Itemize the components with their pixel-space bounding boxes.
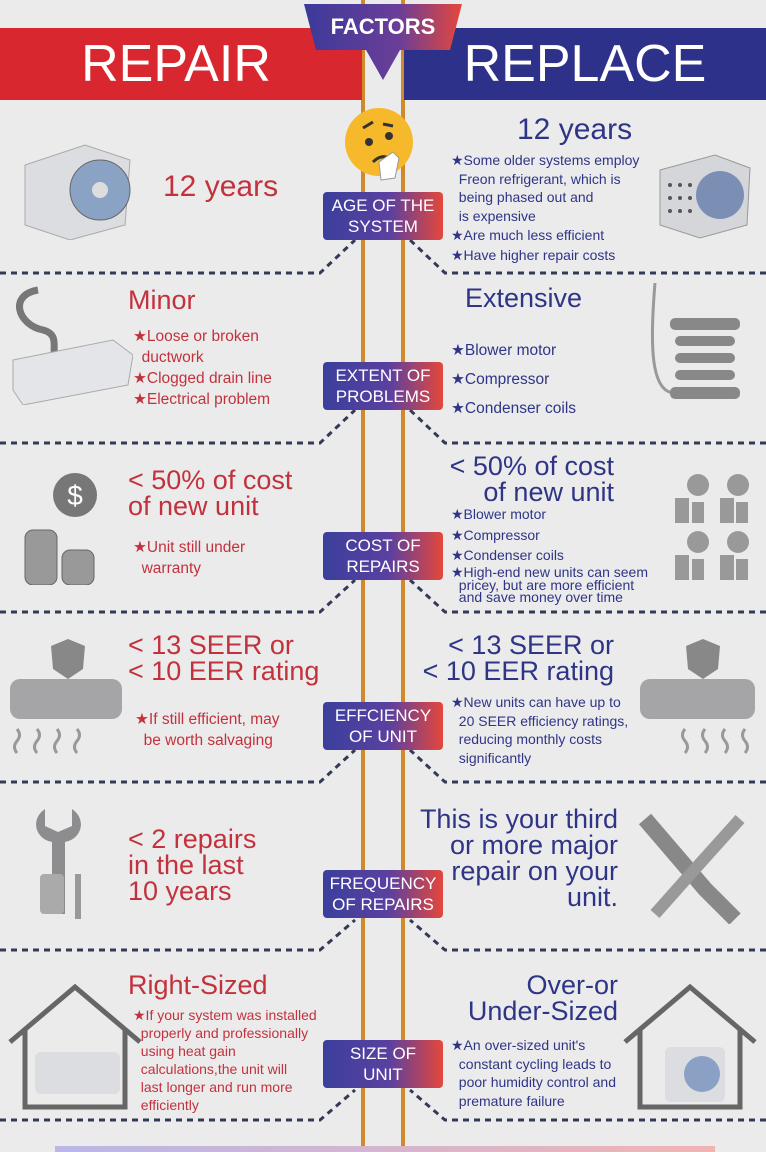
section 3: cost: pricey, but are more efficient bbox=[459, 576, 634, 592]
label: extent: EXTENT OF bbox=[335, 366, 431, 385]
heading bbox=[128, 465, 292, 521]
section 6: size: constant cycling leads to bbox=[459, 1056, 611, 1072]
label: size bbox=[323, 1040, 443, 1088]
icon: wrench hand bbox=[36, 809, 81, 919]
section 6: size bbox=[8, 970, 756, 1113]
section 3: cost: warranty bbox=[142, 560, 201, 577]
header: replace bbox=[404, 28, 766, 100]
label: cost bbox=[323, 532, 443, 580]
icon: ac with shield bbox=[10, 639, 122, 754]
list: ★Have higher repair costs bbox=[451, 247, 615, 263]
label: frequency: FREQUENCY bbox=[330, 874, 436, 893]
section 4: efficiency: ★New units can have up to bbox=[451, 694, 621, 710]
icon: house left bbox=[8, 984, 142, 1110]
section 3: cost bbox=[24, 451, 749, 605]
section 3: cost: ★Blower motor bbox=[451, 506, 546, 522]
section 6: size: properly and professionally bbox=[141, 1025, 308, 1041]
section 6: size: ★If your system was installed bbox=[133, 1007, 317, 1023]
section 3: cost: ★Condenser coils bbox=[451, 547, 564, 563]
section 6: size: calculations,the unit will bbox=[141, 1061, 287, 1077]
label: cost: REPAIRS bbox=[346, 557, 420, 576]
section 3: cost: ★Unit still under bbox=[133, 539, 245, 556]
label: efficiency bbox=[323, 702, 443, 750]
section 4: efficiency: be worth salvaging bbox=[144, 732, 273, 749]
section 5: frequency bbox=[36, 804, 744, 924]
vertical orange lines bbox=[361, 0, 365, 1152]
section 4: efficiency: 20 SEER efficiency ratings, bbox=[459, 712, 628, 728]
section 4: efficiency: significantly bbox=[459, 750, 531, 766]
section 3: cost: ★Compressor bbox=[451, 526, 540, 542]
section 4: efficiency: < 10 EER rating bbox=[128, 656, 319, 686]
section 6: size: ★An over-sized unit's bbox=[451, 1037, 585, 1053]
section 4: efficiency: < 10 EER rating bbox=[423, 656, 614, 686]
label: age: AGE OF THE bbox=[332, 196, 434, 215]
heading: < 50% of cost bbox=[128, 465, 292, 495]
icon: coil bbox=[650, 283, 740, 399]
section 6: size: Under-Sized bbox=[468, 996, 618, 1026]
section 5: frequency: unit. bbox=[567, 882, 618, 912]
icon: coin stacks bbox=[675, 474, 749, 580]
bottom bar bbox=[55, 1146, 715, 1152]
section 6: size: Right-Sized bbox=[128, 970, 268, 1000]
section 2: extent: ★Compressor bbox=[451, 371, 549, 388]
section 5: frequency: 10 years bbox=[128, 876, 232, 906]
section 2: extent: ★Blower motor bbox=[451, 342, 556, 359]
section 2: extent: ★Condenser coils bbox=[451, 400, 576, 417]
section 4: efficiency bbox=[10, 630, 755, 766]
section 6: size: poor humidity control and bbox=[459, 1074, 616, 1090]
section 3: cost: of new unit bbox=[483, 477, 614, 507]
label: size: SIZE OF bbox=[350, 1044, 416, 1063]
section 6: size: premature failure bbox=[459, 1092, 565, 1108]
text: replace 12 years: 12 years bbox=[517, 113, 632, 146]
icon: coins bbox=[24, 473, 97, 585]
section 3: cost: and save money over time bbox=[459, 589, 623, 605]
section 2: extent: ductwork bbox=[142, 349, 204, 366]
section 4: efficiency: ★If still efficient, may bbox=[135, 711, 280, 728]
label: age bbox=[323, 192, 443, 240]
header: repair bbox=[0, 28, 362, 100]
label: efficiency: OF UNIT bbox=[349, 727, 417, 746]
section 5: frequency: or more major bbox=[450, 830, 618, 860]
icon: thinking emoji bbox=[345, 108, 413, 181]
section 5: frequency: This is your third bbox=[420, 804, 618, 834]
section 3: cost: ★High-end new units can seem bbox=[451, 564, 648, 580]
label: efficiency: EFFCIENCY bbox=[335, 706, 431, 725]
icon: house right bbox=[624, 984, 756, 1110]
heading: extensive: Extensive bbox=[465, 283, 582, 313]
list: being phased out and bbox=[459, 189, 593, 205]
icon: coins: $ bbox=[67, 480, 83, 511]
icon: wrench and screwdriver bbox=[639, 814, 744, 924]
icon: ac with warning shield bbox=[640, 639, 755, 754]
section 6: size: using heat gain bbox=[141, 1043, 236, 1059]
label: frequency: OF REPAIRS bbox=[332, 895, 434, 914]
icon: split unit bbox=[12, 286, 133, 405]
section 4: efficiency: < 13 SEER or bbox=[448, 630, 614, 660]
header: repair: REPAIR bbox=[81, 35, 271, 93]
label: cost: COST OF bbox=[345, 536, 421, 555]
section 1: age bbox=[24, 113, 750, 263]
section 6: size: Over-or bbox=[526, 970, 618, 1000]
section 2: extent: ★Loose or broken bbox=[133, 328, 259, 345]
header: replace: REPLACE bbox=[464, 35, 706, 93]
factors badge: FACTORS bbox=[331, 14, 435, 39]
list: Freon refrigerant, which is bbox=[459, 170, 621, 186]
list bbox=[451, 152, 640, 263]
label: size: UNIT bbox=[363, 1065, 403, 1084]
heading: of new unit bbox=[128, 491, 259, 521]
label: frequency bbox=[323, 870, 443, 918]
section 4: efficiency: reducing monthly costs bbox=[459, 731, 602, 747]
label: extent: PROBLEMS bbox=[336, 387, 430, 406]
list: is expensive bbox=[459, 208, 536, 224]
heading: minor: Minor bbox=[128, 285, 196, 315]
section 5: frequency: < 2 repairs bbox=[128, 824, 256, 854]
section 4: efficiency: < 13 SEER or bbox=[128, 630, 294, 660]
section 3: cost: < 50% of cost bbox=[450, 451, 614, 481]
icon: ac unit left bbox=[24, 144, 130, 240]
list: ★Some older systems employ bbox=[451, 152, 639, 168]
label: extent bbox=[323, 362, 443, 410]
section 2: extent: ★Electrical problem bbox=[133, 391, 270, 408]
section 6: size: efficiently bbox=[141, 1097, 199, 1113]
section 2: extent: ★Clogged drain line bbox=[133, 370, 272, 387]
section 2: extent bbox=[12, 283, 740, 417]
factors badge bbox=[304, 4, 462, 80]
label: age: SYSTEM bbox=[348, 217, 418, 236]
section 6: size: last longer and run more bbox=[141, 1079, 293, 1095]
list: ★Are much less efficient bbox=[451, 227, 604, 243]
icon: ac unit right bbox=[660, 154, 750, 238]
section 5: frequency: in the last bbox=[128, 850, 244, 880]
text: 12 years: 12 years bbox=[163, 170, 278, 203]
section 5: frequency: repair on your bbox=[451, 856, 618, 886]
